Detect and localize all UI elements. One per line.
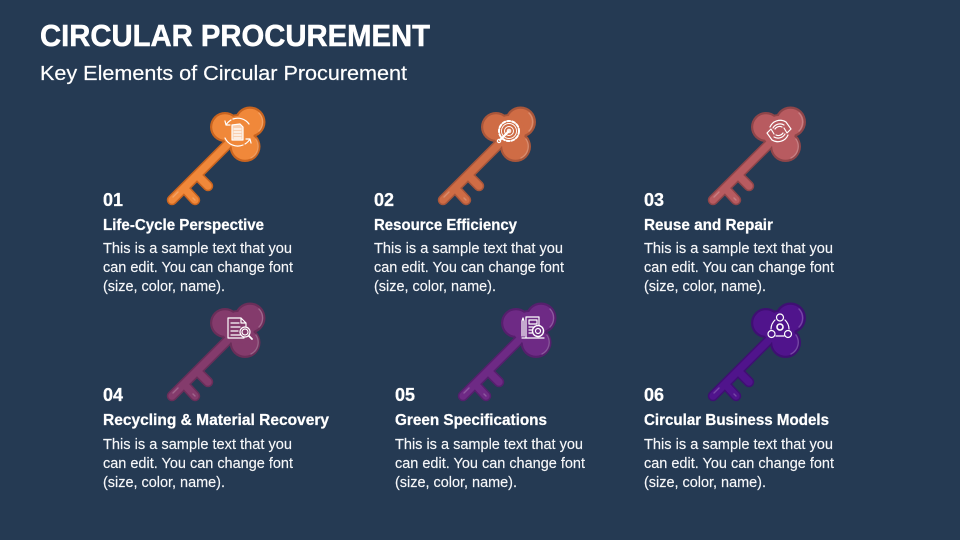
body text 02 bbox=[374, 241, 564, 295]
heading: Recycling & Material Recovery: Recycling & Material Recovery bbox=[103, 412, 329, 429]
body text 06 bbox=[644, 437, 834, 491]
body text 02: can edit. You can change font bbox=[374, 260, 564, 276]
heading: Reuse and Repair: Reuse and Repair bbox=[644, 217, 773, 234]
icon: document with magnifier bbox=[228, 318, 252, 339]
body text 01: (size, color, name). bbox=[103, 279, 225, 295]
body text 05 bbox=[395, 437, 585, 491]
heading: Resource Efficiency: Resource Efficiency bbox=[374, 217, 517, 234]
panel: item 06 bbox=[644, 302, 834, 491]
body text 04: (size, color, name). bbox=[103, 475, 225, 491]
body text 03 bbox=[644, 241, 834, 295]
number 05: 05 bbox=[395, 385, 415, 405]
icon: business model cycle bbox=[768, 314, 792, 338]
body text 05: can edit. You can change font bbox=[395, 456, 585, 472]
body text 01: can edit. You can change font bbox=[103, 260, 293, 276]
icon: violet key bbox=[713, 302, 806, 396]
body text 03: (size, color, name). bbox=[644, 279, 766, 295]
body text 03: This is a sample text that you bbox=[644, 241, 833, 257]
body text 04: can edit. You can change font bbox=[103, 456, 293, 472]
icon: circular repair arrows bbox=[767, 120, 791, 142]
title: CIRCULAR PROCUREMENT bbox=[40, 18, 430, 53]
icon: orange key bbox=[172, 106, 266, 200]
icon: purple key bbox=[463, 302, 556, 396]
panel: item 05 bbox=[395, 302, 585, 491]
body text 01: This is a sample text that you bbox=[103, 241, 292, 257]
panel: item 02 bbox=[374, 106, 564, 295]
body text 02: This is a sample text that you bbox=[374, 241, 563, 257]
body text 06: This is a sample text that you bbox=[644, 437, 833, 453]
icon: terracotta key bbox=[443, 106, 536, 200]
icon: document with cycle arrows bbox=[225, 118, 251, 146]
heading: Life-Cycle Perspective: Life-Cycle Perspective bbox=[103, 217, 264, 234]
icon: rose key bbox=[713, 106, 806, 200]
heading: Green Specifications: Green Specifications bbox=[395, 412, 547, 429]
icon: gear with target bbox=[497, 121, 519, 143]
body text 05: (size, color, name). bbox=[395, 475, 517, 491]
body text 03: can edit. You can change font bbox=[644, 260, 834, 276]
number 01: 01 bbox=[103, 190, 123, 210]
panel: item 04 bbox=[103, 302, 329, 491]
body text 05: This is a sample text that you bbox=[395, 437, 583, 453]
body text 06: can edit. You can change font bbox=[644, 456, 834, 472]
body text 02: (size, color, name). bbox=[374, 279, 496, 295]
number 04: 04 bbox=[103, 385, 123, 405]
body text 04 bbox=[103, 437, 293, 491]
body text 01 bbox=[103, 241, 293, 295]
body text 04: This is a sample text that you bbox=[103, 437, 292, 453]
icon: plum key bbox=[172, 302, 266, 396]
body text 06: (size, color, name). bbox=[644, 475, 766, 491]
subtitle: Key Elements of Circular Procurement bbox=[40, 62, 407, 85]
panel: item 01 bbox=[103, 106, 293, 295]
number 02: 02 bbox=[374, 190, 394, 210]
number 03: 03 bbox=[644, 190, 664, 210]
icon: specification sheet with gear bbox=[522, 317, 544, 338]
heading: Circular Business Models: Circular Business Models bbox=[644, 412, 829, 429]
panel: item 03 bbox=[644, 106, 834, 295]
number 06: 06 bbox=[644, 385, 664, 405]
